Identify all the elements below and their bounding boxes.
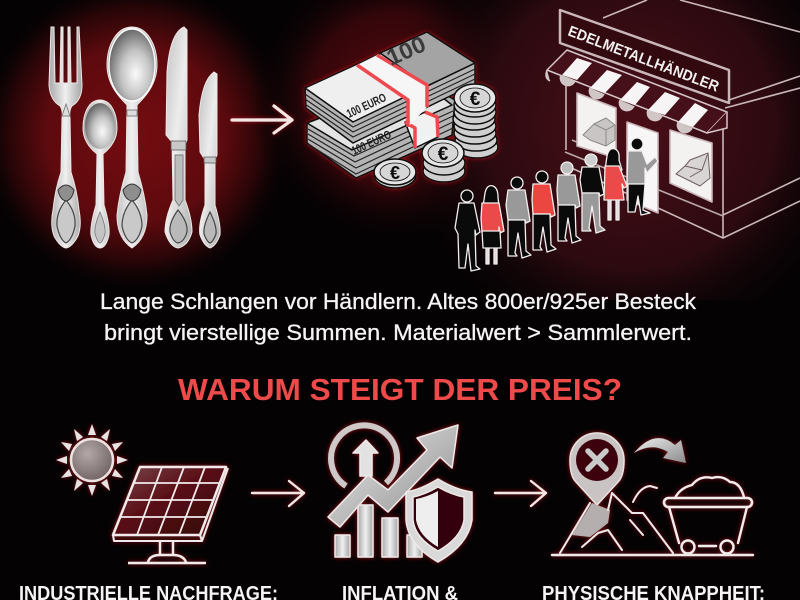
description text: Lange Schlangen vor Händlern. Altes 800er/925er Besteck [100, 289, 697, 314]
person 6 [580, 154, 605, 233]
arrow: solar to inflation [252, 481, 304, 506]
bill label upper: 100 EURO [344, 90, 388, 121]
cutlery group [49, 27, 220, 248]
bill denomination: 100 [382, 31, 430, 71]
coin stack middle [422, 139, 465, 182]
person 8 [627, 138, 658, 215]
person 1 [455, 190, 480, 271]
butter knife [199, 72, 220, 248]
arrow: cutlery to money [232, 106, 292, 133]
fork [49, 27, 82, 248]
silver bars left [583, 118, 615, 146]
icon: mine, pin and cart [552, 433, 753, 555]
sun [56, 424, 128, 496]
icon: inflation chart and shield [328, 425, 472, 562]
person 2 [481, 186, 504, 264]
icon: sun and solar panel [56, 424, 228, 563]
queue of people [455, 138, 658, 271]
large spoon [107, 27, 157, 248]
mine cart [664, 477, 752, 554]
shield [406, 479, 472, 562]
upper bill stack [305, 31, 475, 158]
person 5 [557, 162, 581, 243]
coin stack right [453, 84, 498, 158]
description text [100, 289, 697, 345]
mountain [560, 486, 673, 553]
building outline [565, 0, 800, 238]
map pin with cross [570, 433, 624, 505]
awning [546, 50, 727, 133]
description text: bringt vierstellige Summen. Materialwert > Sammlerwert. [104, 320, 692, 345]
solar panel [113, 467, 228, 563]
left window [577, 93, 616, 158]
curved arrow [634, 438, 686, 463]
lower bill stack [307, 80, 455, 178]
shop sign board [560, 10, 729, 103]
euro sign: € [390, 163, 400, 183]
euro sign: € [470, 89, 481, 110]
shop: Edelmetallhändler [546, 0, 800, 238]
door [627, 122, 658, 213]
money stacks and coins [305, 31, 498, 188]
knife [165, 27, 192, 248]
circle with up arrow [331, 425, 397, 486]
bill label lower: 100 EURO [349, 127, 393, 158]
person 4 [532, 171, 556, 252]
person 3 [506, 177, 531, 258]
bars [335, 505, 422, 557]
ground line [552, 554, 753, 556]
right window [670, 130, 712, 202]
rising arrow [328, 425, 458, 527]
single coin [374, 159, 416, 188]
shop front lines [565, 140, 723, 216]
person 7 [604, 149, 627, 220]
heading: WARUM STEIGT DER PREIS? [178, 372, 622, 407]
arrow: inflation to scarcity [495, 481, 546, 506]
euro sign: € [438, 144, 449, 165]
sign text: EDELMETALLHÄNDLER [566, 23, 721, 96]
small spoon [83, 100, 117, 248]
silver bars right [676, 153, 710, 186]
